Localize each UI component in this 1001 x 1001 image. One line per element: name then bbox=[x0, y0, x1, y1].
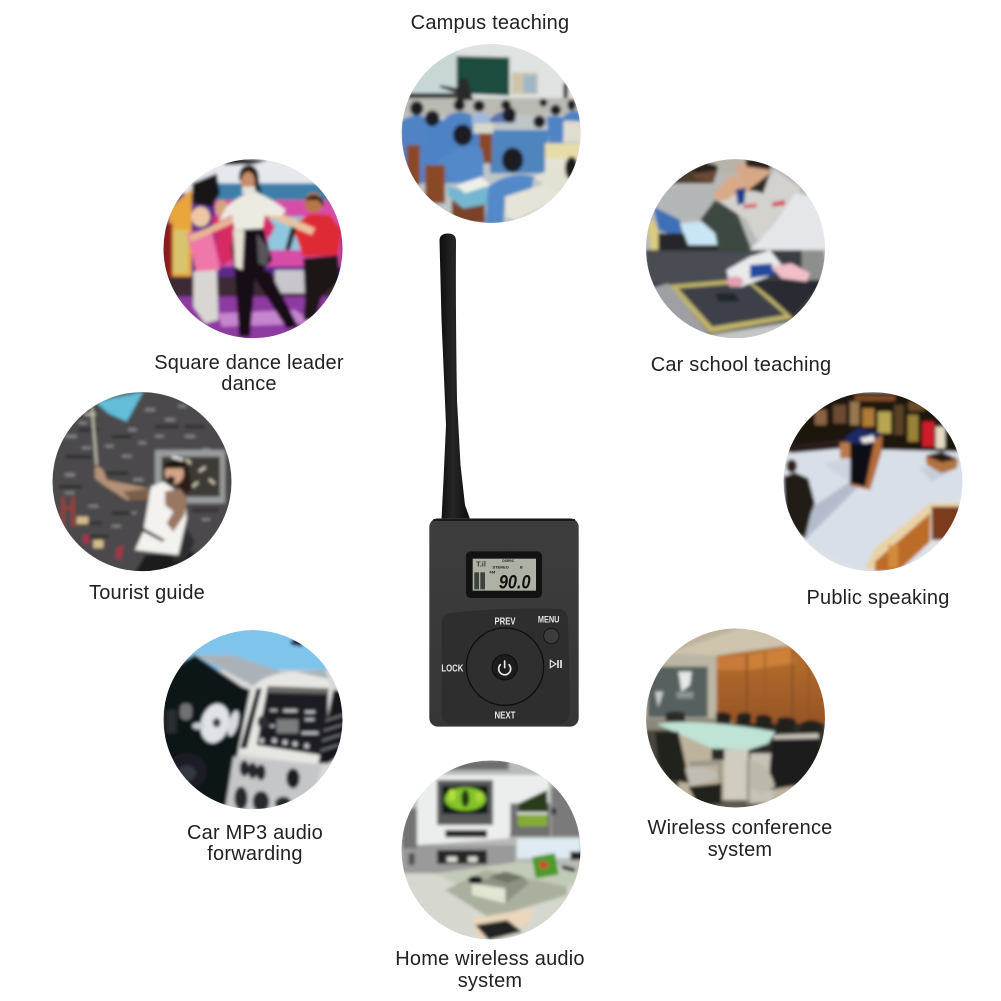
label: Home wireless audio system: Home wireless audio bbox=[395, 948, 585, 970]
button panel bbox=[442, 608, 570, 724]
panel: home wireless audio system bbox=[392, 755, 592, 992]
navigation ring bbox=[466, 628, 544, 705]
panel: public speaking bbox=[784, 392, 962, 608]
label: LOCK: LOCK bbox=[441, 664, 463, 675]
label: Square dance leader dance bbox=[154, 352, 344, 395]
label: Home wireless audio system bbox=[395, 948, 585, 992]
panel: square dance leader dance bbox=[155, 159, 344, 390]
label: Public speaking: Public speaking bbox=[806, 587, 950, 609]
photo: living room with TV bbox=[402, 760, 580, 940]
label: Car MP3 audio forwarding: forwarding bbox=[207, 843, 303, 865]
lcd display: STEREO bbox=[492, 565, 509, 570]
label: Wireless conference system: Wireless conference bbox=[648, 817, 832, 839]
label: NEXT: NEXT bbox=[494, 710, 516, 721]
panel: wireless conference system bbox=[646, 628, 832, 860]
device: FM transmitter bbox=[429, 234, 579, 727]
photo: dancers on stage bbox=[164, 159, 342, 338]
menu button bbox=[544, 628, 559, 644]
label: Wireless conference system bbox=[648, 817, 832, 861]
device body bbox=[429, 518, 579, 727]
lcd display: T.il bbox=[476, 560, 486, 569]
photo: conference room bbox=[646, 628, 825, 808]
label: Square dance leader dance: dance bbox=[221, 373, 277, 395]
label: Car school teaching: Car school teaching bbox=[651, 354, 831, 376]
photo: car dashboard bbox=[164, 630, 342, 810]
lcd display bbox=[466, 551, 542, 598]
label: Home wireless audio system: system bbox=[458, 970, 522, 992]
label: Campus teaching: Campus teaching bbox=[411, 12, 569, 34]
label: Car MP3 audio forwarding bbox=[187, 822, 323, 865]
lcd display: FM bbox=[489, 569, 496, 574]
power button bbox=[492, 655, 517, 680]
panel: car school teaching bbox=[646, 159, 830, 375]
photo: car window film class bbox=[646, 159, 825, 338]
label: MENU: MENU bbox=[538, 615, 560, 625]
lcd display: B bbox=[520, 565, 523, 570]
panel: car MP3 audio forwarding bbox=[164, 630, 342, 864]
antenna bbox=[440, 234, 470, 519]
label: PREV: PREV bbox=[494, 617, 516, 628]
label: Car MP3 audio forwarding: Car MP3 audio bbox=[187, 822, 323, 844]
panel: tourist guide bbox=[52, 392, 232, 603]
photo: podium in front of audience bbox=[784, 392, 962, 572]
label: Wireless conference system: system bbox=[708, 839, 772, 861]
panel: campus teaching bbox=[402, 14, 581, 223]
label: Square dance leader dance: Square dance leader bbox=[154, 352, 344, 374]
photo: classroom bbox=[402, 44, 581, 223]
photo: guide with flag by brick wall bbox=[52, 392, 232, 572]
label: Tourist guide: Tourist guide bbox=[89, 582, 205, 604]
lcd display: 90.0 bbox=[499, 573, 531, 594]
lcd display: DSRRC bbox=[502, 559, 515, 563]
icon: play pause bbox=[550, 660, 561, 668]
